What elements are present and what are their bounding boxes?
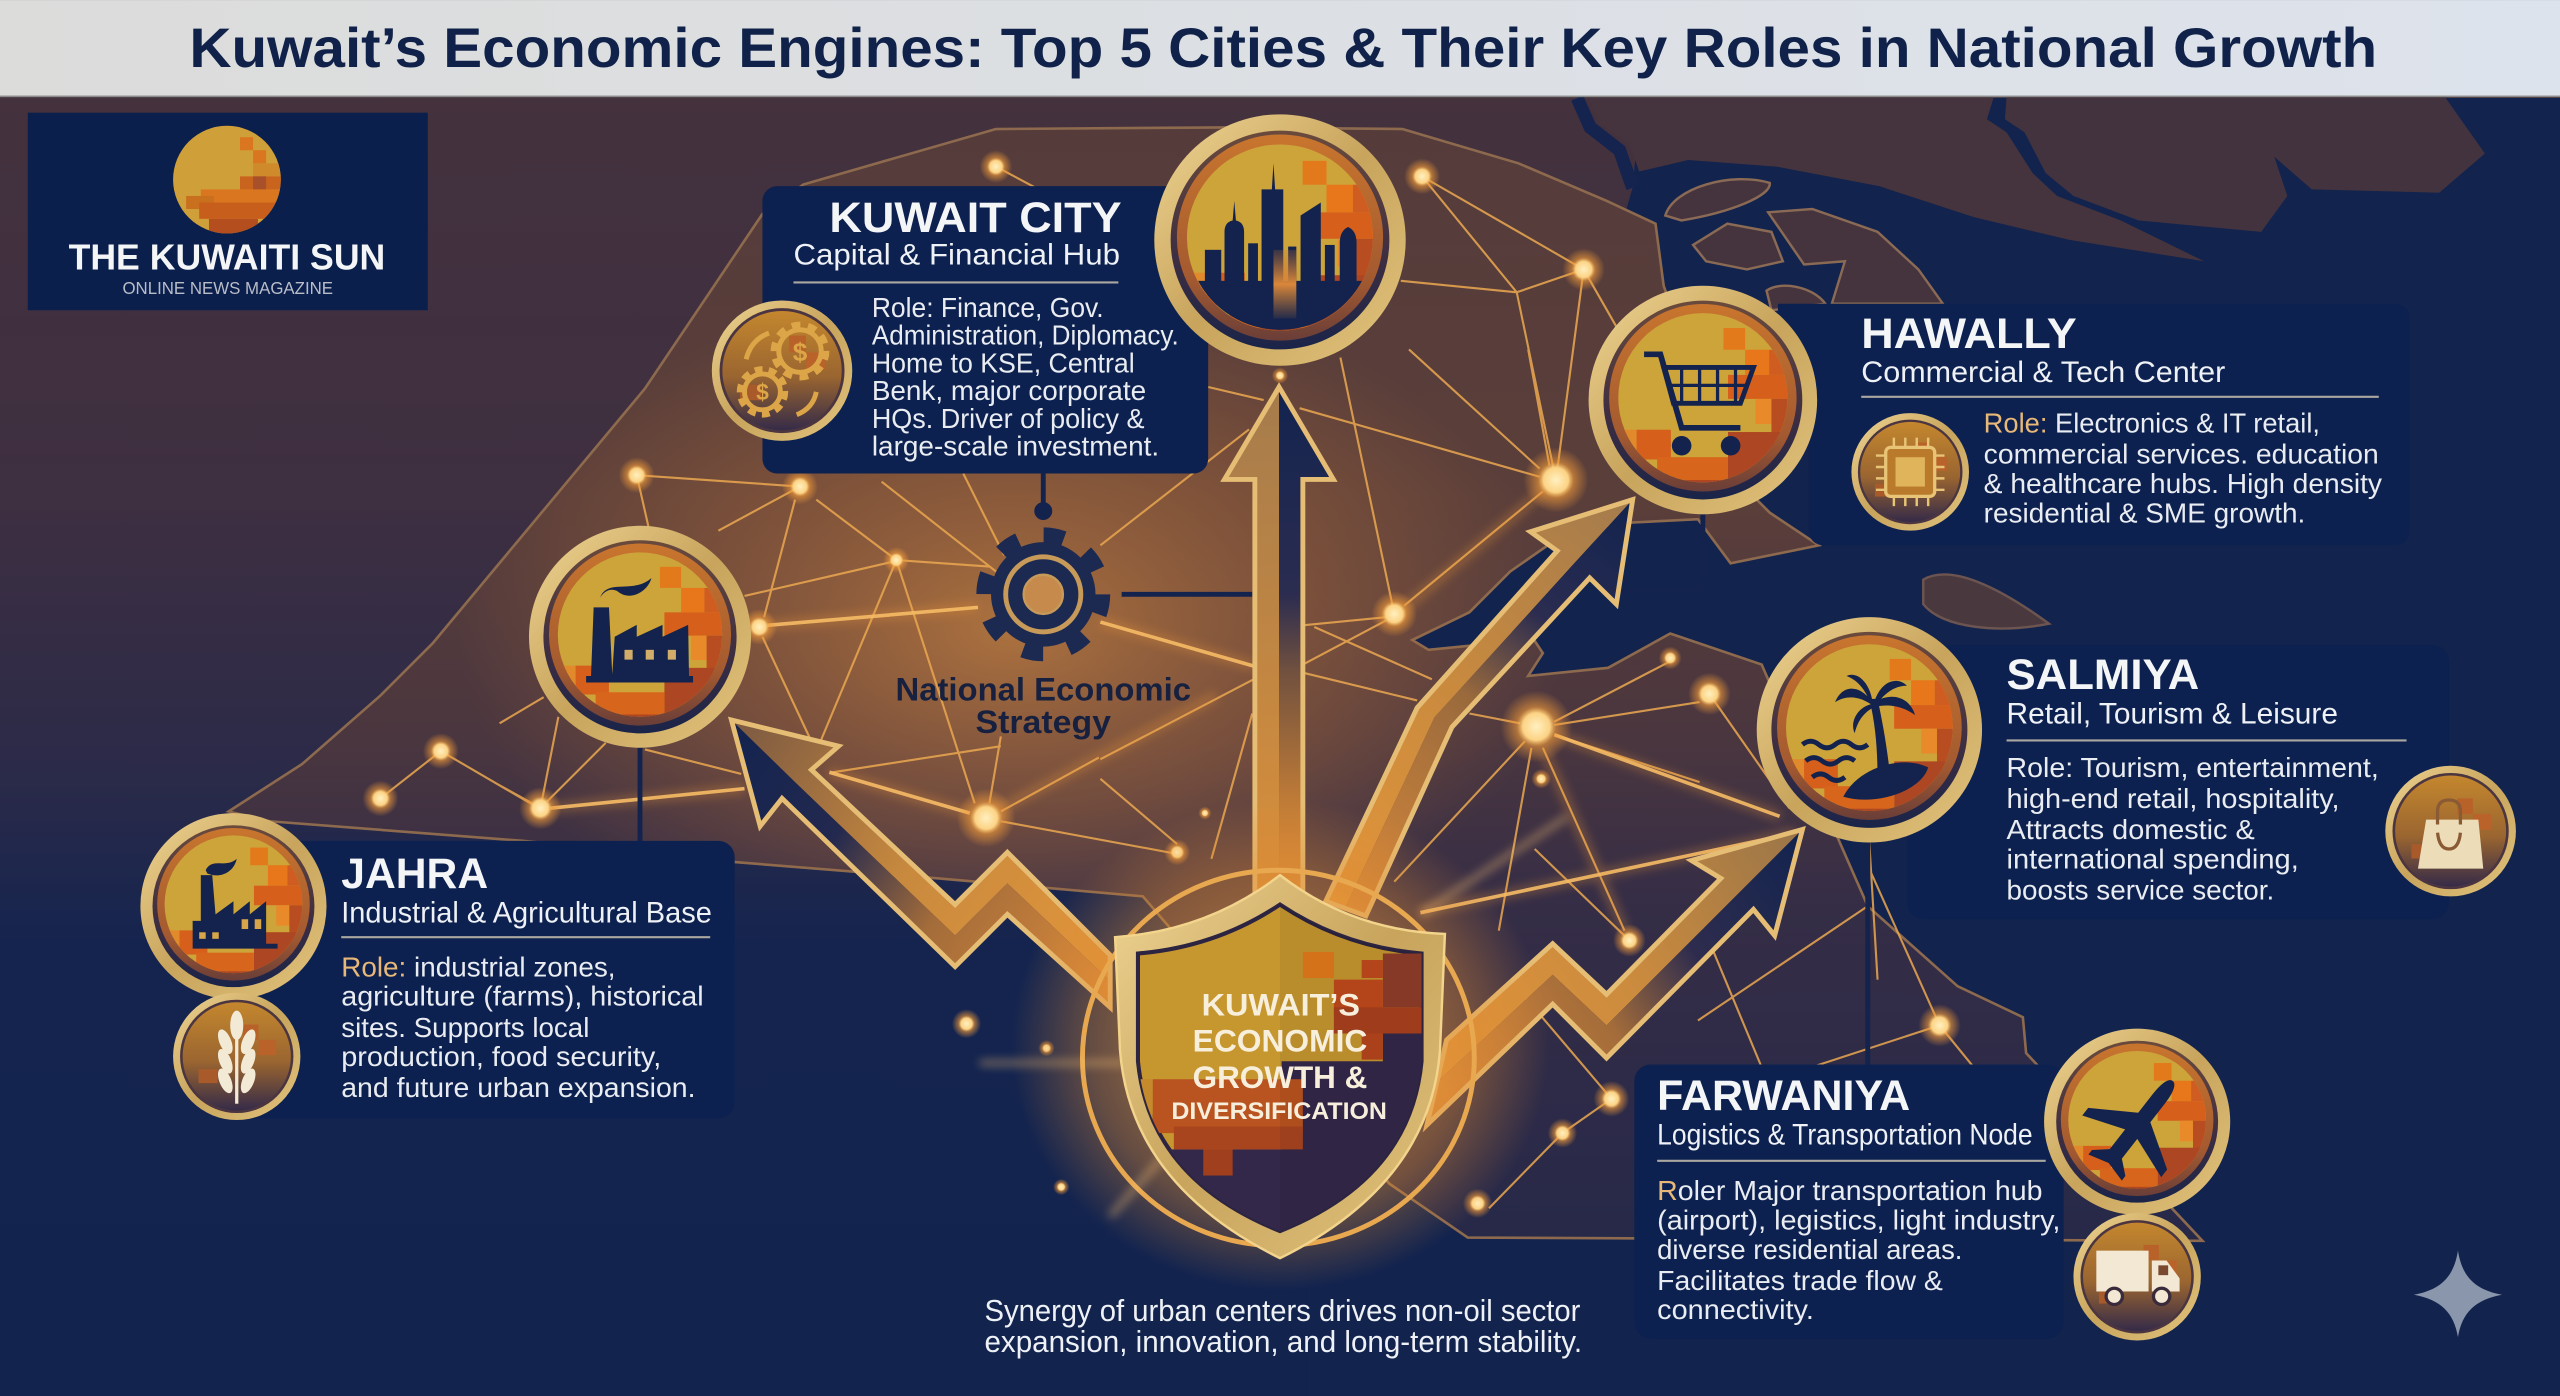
icon: Jahra factory xyxy=(140,813,327,999)
panel: Salmiya: high-end retail, hospitality, xyxy=(2007,783,2340,814)
panel: Jahra: agriculture (farms), historical xyxy=(341,981,704,1012)
panel: Jahra: and future urban expansion. xyxy=(341,1072,696,1103)
panel: Salmiya: Role: Tourism, entertainment, xyxy=(2007,752,2379,783)
network of glowing links xyxy=(362,150,1976,1218)
panel: Hawally: & healthcare hubs. High density xyxy=(1984,468,2382,499)
panel: Hawally: residential & SME growth. xyxy=(1984,497,2305,528)
panel: Kuwait City: large-scale investment. xyxy=(872,431,1159,462)
shield label: KUWAIT’S xyxy=(1202,988,1360,1023)
icon: Kuwait City gears and currency xyxy=(712,300,852,441)
panel: Jahra: Industrial & Agricultural Base xyxy=(341,896,712,929)
icon: Farwaniya airplane xyxy=(2044,1029,2230,1215)
arrow: zigzag to Salmiya xyxy=(1427,829,1802,1125)
icon: Kuwait City gears and currency: $ xyxy=(756,379,769,405)
label: National Economic Strategy xyxy=(896,670,1191,740)
panel: Farwaniya: Facilitates trade flow & xyxy=(1657,1265,1943,1296)
icon: wheat xyxy=(173,993,300,1120)
panel: Salmiya: international spending, xyxy=(2007,844,2299,875)
panel: Kuwait City: KUWAIT CITY xyxy=(829,194,1122,241)
icon: national strategy gear xyxy=(984,536,1102,653)
arrow: up to Hawally xyxy=(1326,500,1633,916)
logo: The Kuwaiti Sun xyxy=(28,113,428,310)
title bar xyxy=(0,0,2560,97)
panel: Farwaniya: (airport), legistics, light industry, xyxy=(1657,1204,2060,1235)
icon: Salmiya shopping bag xyxy=(2385,766,2516,896)
panel: Farwaniya: Roler Major transportation hub xyxy=(1657,1175,2042,1206)
panel: Salmiya: boosts service sector. xyxy=(2007,875,2274,906)
panel: Farwaniya: FARWANIYA xyxy=(1657,1072,1910,1119)
title bar: Kuwait’s Economic Engines: Top 5 Cities & Their Key Roles in National Growth xyxy=(189,17,2377,79)
icon: Hawally microchip xyxy=(1851,413,1969,531)
connector lines xyxy=(640,474,1868,1065)
panel: Salmiya xyxy=(1907,645,2449,919)
label: National Economic Strategy: National Economic xyxy=(896,670,1191,707)
icon: sparkle mark xyxy=(2414,1251,2502,1337)
icon: Kuwait City skyline xyxy=(1154,114,1406,366)
panel: Kuwait City: Capital & Financial Hub xyxy=(793,239,1120,272)
panel: Jahra: JAHRA xyxy=(341,850,488,897)
panel: Hawally xyxy=(1778,304,2410,545)
panel: Kuwait City: Administration, Diplomacy. xyxy=(872,320,1179,351)
shield label: DIVERSIFICATION xyxy=(1171,1098,1387,1125)
arrow: centre up to Kuwait City xyxy=(1224,387,1333,898)
panel: Farwaniya: Logistics & Transportation Node xyxy=(1657,1119,2033,1152)
footer statement xyxy=(984,1295,1582,1359)
icon: Kuwait City gears and currency: $ xyxy=(793,337,808,367)
logo: The Kuwaiti Sun: THE KUWAITI SUN xyxy=(69,236,385,277)
panel: Kuwait City: Benk, major corporate xyxy=(872,375,1146,406)
panel: Jahra xyxy=(229,841,735,1118)
panel: Hawally: commercial services. education xyxy=(1984,439,2379,470)
panel: Hawally: Role: Electronics & IT retail, xyxy=(1984,408,2320,439)
panel: Jahra: production, food security, xyxy=(341,1041,661,1072)
panel: Jahra: Role: industrial zones, xyxy=(341,951,616,982)
panel: Farwaniya: diverse residential areas. xyxy=(1657,1234,1962,1265)
footer statement: expansion, innovation, and long-term stability. xyxy=(984,1326,1582,1359)
icon: delivery truck xyxy=(2073,1213,2201,1340)
icon: Hawally shopping cart xyxy=(1589,286,1817,514)
shield label: GROWTH & xyxy=(1193,1060,1367,1095)
panel: Kuwait City: HQs. Driver of policy & xyxy=(872,403,1145,434)
arrow: zigzag to the industrial hub xyxy=(731,720,1110,1007)
panel: Farwaniya: connectivity. xyxy=(1657,1294,1814,1325)
map: Kuwait land and coastline xyxy=(229,98,2485,1241)
footer statement: Synergy of urban centers drives non-oil sector xyxy=(984,1295,1580,1328)
central shield xyxy=(980,800,1567,1290)
icon: factory xyxy=(529,526,751,748)
panel: Farwaniya xyxy=(1634,1065,2064,1339)
panel: Kuwait City xyxy=(762,186,1208,474)
panel: Kuwait City: Home to KSE, Central xyxy=(872,347,1135,378)
panel: Salmiya: SALMIYA xyxy=(2007,651,2199,698)
label: National Economic Strategy: Strategy xyxy=(976,703,1111,740)
logo: The Kuwaiti Sun: ONLINE NEWS MAGAZINE xyxy=(122,278,333,298)
shield label: ECONOMIC xyxy=(1193,1023,1367,1058)
shield label xyxy=(1171,988,1387,1125)
panel: Salmiya: Retail, Tourism & Leisure xyxy=(2007,697,2338,730)
panel: Hawally: Commercial & Tech Center xyxy=(1861,356,2226,389)
panel: Kuwait City: Role: Finance, Gov. xyxy=(872,292,1104,323)
panel: Salmiya: Attracts domestic & xyxy=(2007,814,2255,845)
panel: Hawally: HAWALLY xyxy=(1861,310,2077,357)
panel: Jahra: sites. Supports local xyxy=(341,1012,589,1043)
icon: Salmiya palm and island xyxy=(1757,617,1982,842)
